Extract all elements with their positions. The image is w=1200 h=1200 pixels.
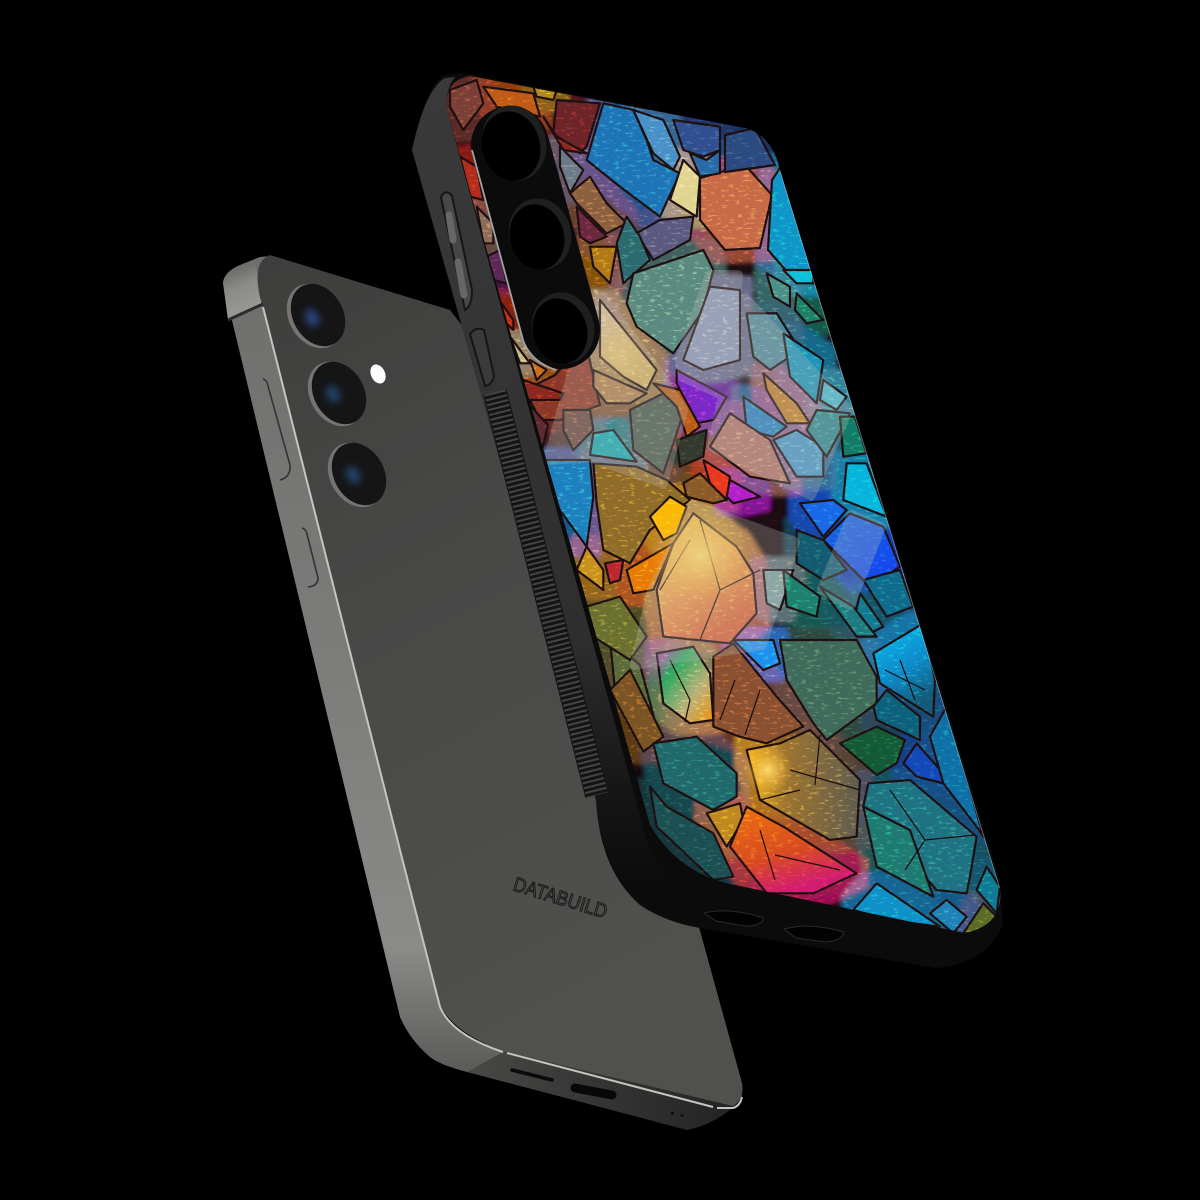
side button power [470,329,494,386]
warm glow [652,512,746,597]
case outer body [412,73,1003,968]
upper right cells [520,128,818,740]
back panel [258,255,743,1106]
rail top block [223,262,263,320]
lens hole bottom [524,285,602,371]
bottom port 1 [704,911,764,926]
speaker slot [512,1070,552,1080]
case side wall [412,77,672,885]
mosaic colour underlay [450,80,1000,933]
lens hole top [473,98,555,188]
island edge highlight [472,150,556,370]
glow cream [599,325,646,384]
camera lens bottom [316,433,397,517]
side button long [263,379,290,480]
glow lower [746,750,792,791]
frame highlight [263,307,742,1108]
side button short [302,528,318,587]
mic holes [671,1113,684,1116]
bottom port 2 [784,926,844,942]
rail seam [228,304,263,320]
centre cells [543,270,913,660]
product scene [223,74,1003,1130]
phone metal rail [223,256,503,1072]
cracks [660,520,975,880]
camera lens top [275,274,356,358]
camera island [472,98,602,371]
flash [367,362,389,386]
glass reflections [548,275,881,665]
side button volume [441,192,472,310]
grey phone [223,255,743,1130]
ribbed grip [495,392,597,795]
edge highlight [780,170,1000,888]
speckle texture [447,77,999,932]
phone bottom edge [460,1040,742,1130]
mosaic cells [450,80,1000,933]
lens hole middle [501,191,579,277]
brand text: DATABUILD [511,874,610,923]
camera lens middle [296,352,377,436]
top cells [450,80,720,400]
glass base [634,262,840,906]
stained glass case [412,60,1020,968]
usb port [575,1088,612,1095]
lower cells [610,623,1000,933]
glass panel [430,60,1020,950]
